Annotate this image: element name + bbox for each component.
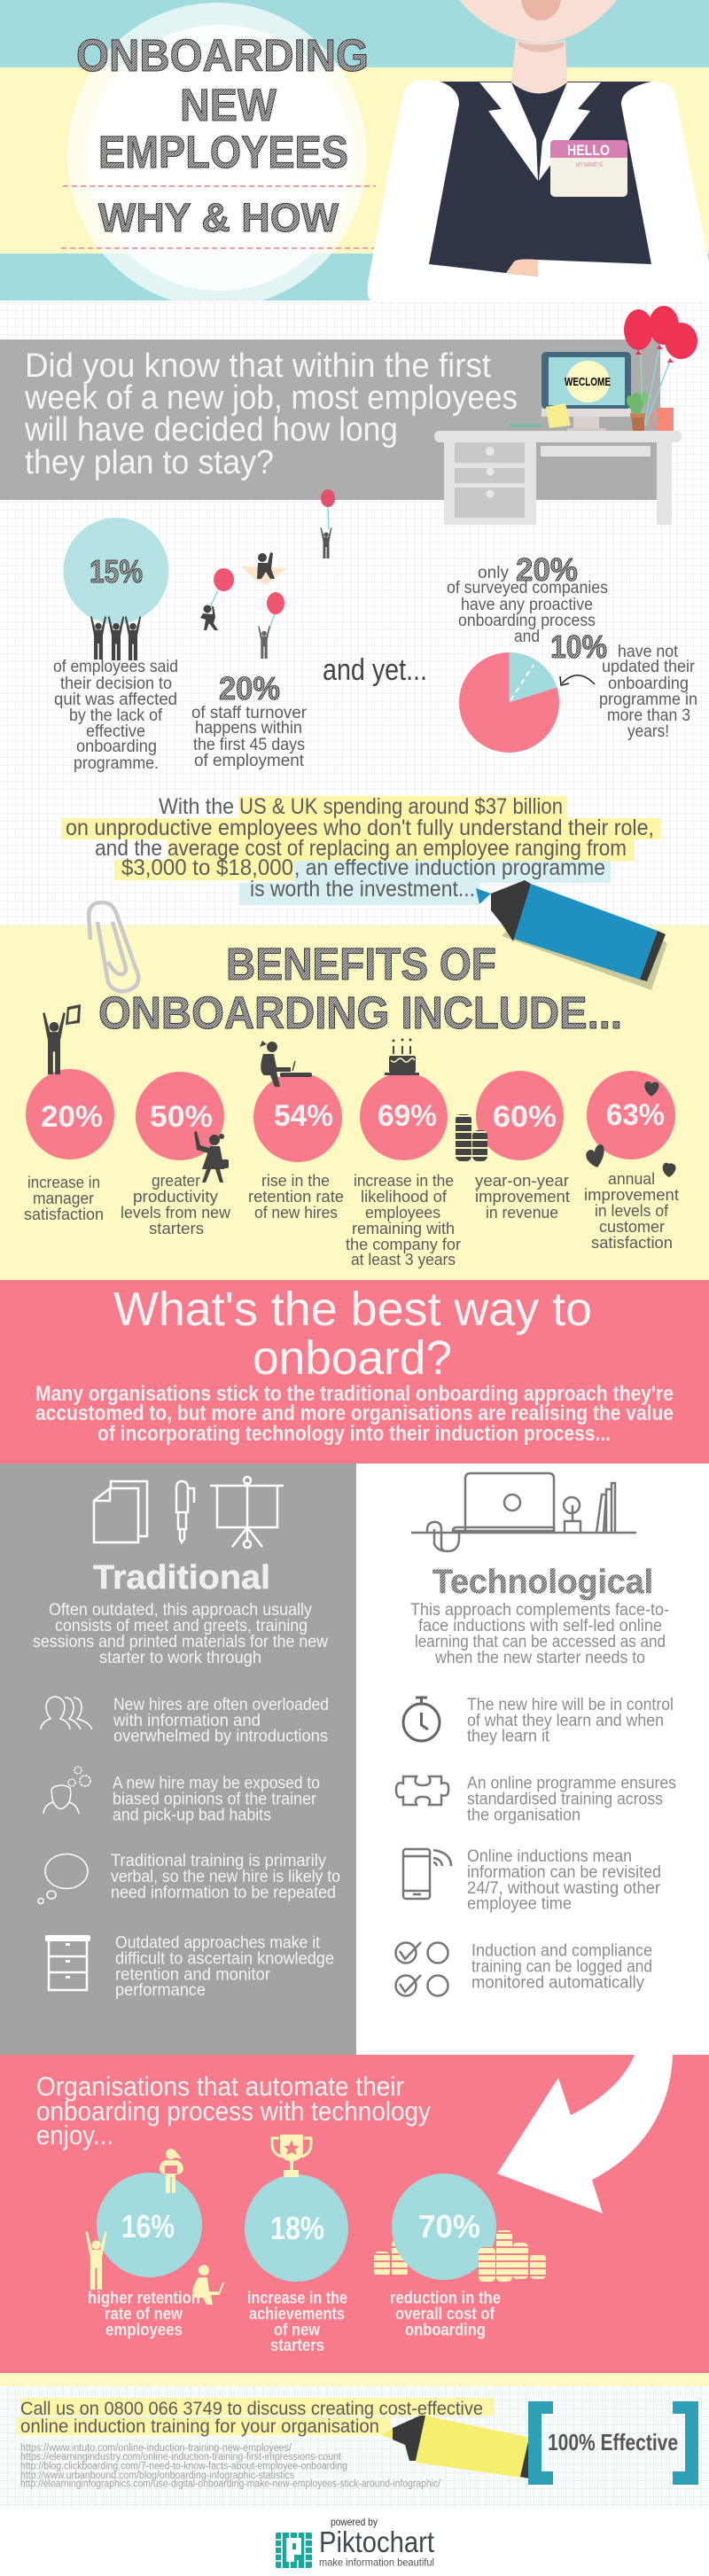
sources: https://www.intuto.com/online-induction-training-new-employees/ <box>20 2443 292 2454</box>
stat labels <box>88 2289 501 2355</box>
highlighted paragraph: , an effective induction programme <box>294 855 605 880</box>
heading: enjoy... <box>36 2119 113 2151</box>
benefit labels: in revenue <box>486 1204 558 1222</box>
stat: 20% staff turnover: the first 45 days <box>193 736 305 754</box>
item: stopwatch: The new hire will be in control <box>467 1696 674 1714</box>
intro: Often outdated, this approach usually <box>49 1601 312 1620</box>
footer: Piktochart logo: make information beautiful <box>319 2556 434 2569</box>
highlighted paragraph: US & UK spending around $37 billion <box>239 794 563 819</box>
intro: face inductions with self-led online <box>418 1617 662 1635</box>
item: biased opinions <box>43 1767 320 1824</box>
item: stopwatch: they learn it <box>467 1727 550 1746</box>
icon: hearts <box>586 1081 676 1177</box>
item: overloaded: with information and <box>113 1712 261 1730</box>
item: stopwatch <box>403 1696 674 1746</box>
panel: traditional <box>0 1464 356 2055</box>
item: checklist: training can be logged and <box>471 1957 652 1977</box>
stat: 20% and 10% of companies: onboarding <box>608 675 689 693</box>
benefit labels <box>24 1170 679 1268</box>
icon: laptop on shelf <box>411 1473 636 1551</box>
stat labels: higher retention <box>88 2289 200 2308</box>
item: checklist: Induction and compliance <box>471 1941 652 1961</box>
item: biased opinions: A new hire may be exposed to <box>113 1775 320 1792</box>
yellow divider strip <box>0 2373 709 2386</box>
highlighted paragraph: With the <box>159 794 234 819</box>
stat: 20% and 10% of companies <box>447 551 697 753</box>
sources: https://elearningindustry.com/online-induction-training-first-impressions-count <box>20 2452 342 2463</box>
panel: did you know band <box>0 340 660 500</box>
stat: 20% staff turnover: of employment <box>194 752 305 770</box>
benefit labels: productivity <box>133 1188 218 1206</box>
heading: traditional: Traditional <box>93 1559 270 1596</box>
benefit labels: year-on-year <box>475 1172 569 1190</box>
item: puzzle piece: An online programme ensures <box>467 1775 676 1792</box>
stat: 20% and 10% of companies: more than 3 <box>607 706 690 725</box>
icon: paperclip <box>89 902 138 991</box>
intro <box>410 1601 669 1667</box>
stat: 20% and 10% of companies: 10% <box>550 628 607 665</box>
benefit labels: increase in the <box>354 1172 454 1190</box>
item: biased opinions: and pick-up bad habits <box>113 1807 271 1824</box>
item: overloaded <box>41 1696 329 1746</box>
heading: ONBOARDING INCLUDE... <box>98 987 622 1038</box>
title: ONBOARDING <box>76 30 369 81</box>
heading: Organisations that automate their <box>36 2071 404 2102</box>
arrow: large curved white <box>497 2055 673 2213</box>
stat labels: achievements <box>249 2305 345 2324</box>
text: and yet: and yet... <box>323 653 427 687</box>
stat: 20% staff turnover: happens within <box>195 719 302 738</box>
call to action <box>17 2398 494 2437</box>
item: overloaded: overwhelmed by introductions <box>113 1727 328 1746</box>
stat percentages <box>121 2208 480 2246</box>
stat: 20% and 10% of companies: onboarding process <box>458 612 596 630</box>
icon: coin stacks <box>479 2230 546 2282</box>
icon: woman on laptop <box>260 1041 312 1087</box>
footer: Piktochart logo: powered by <box>331 2516 378 2528</box>
desk <box>434 431 682 525</box>
panel: automation benefits <box>0 2055 709 2373</box>
item: filing cabinet: difficult to ascertain knowledge <box>115 1950 334 1968</box>
stat: 15% quit: programme. <box>74 754 159 773</box>
heading: onboard? <box>253 1331 452 1385</box>
icon: presentation board <box>210 1477 284 1548</box>
stat: 15% quit: effective <box>86 722 145 741</box>
icon: birthday cake <box>385 1039 419 1075</box>
benefit labels: employees <box>365 1204 440 1222</box>
panel: best way to onboard <box>0 1280 709 1464</box>
benefit labels: at least 3 years <box>351 1251 456 1268</box>
item: smartphone <box>403 1847 661 1913</box>
benefit labels: greater <box>152 1172 200 1190</box>
call to action: online induction training for your organisation <box>20 2416 379 2437</box>
benefit percentages: 20% <box>41 1100 103 1134</box>
benefit labels: improvement <box>475 1188 570 1206</box>
panel: call to action and sources <box>0 2386 709 2508</box>
arrow <box>560 675 595 685</box>
stat labels: reduction in the <box>390 2289 501 2308</box>
brackets with 100% effective <box>528 2401 698 2485</box>
illustration: new employee <box>368 0 709 301</box>
stat: 20% and 10% of companies: of surveyed companies <box>447 579 608 597</box>
benefit labels: improvement <box>584 1186 679 1204</box>
item: smartphone: Online inductions mean <box>467 1847 632 1866</box>
benefit labels: retention rate <box>248 1188 344 1206</box>
benefit labels: satisfaction <box>591 1234 673 1252</box>
benefit percentages: 63% <box>606 1098 665 1132</box>
stat labels: increase in the <box>247 2289 347 2308</box>
icon: woman with laptop <box>160 2149 183 2193</box>
benefit labels: in levels of <box>595 1202 669 1220</box>
call to action: Call us on 0800 066 3749 to discuss creating cost-effective <box>20 2399 483 2419</box>
stat labels: rate of new <box>105 2305 183 2324</box>
icon: balloons and floating people <box>200 489 335 659</box>
question text: they plan to stay? <box>25 444 274 481</box>
benefit labels: the company for <box>346 1236 461 1253</box>
brackets with 100% effective: 100% Effective <box>548 2429 678 2455</box>
question text: Did you know that within the first <box>25 347 491 385</box>
heading: technological: Technological <box>432 1564 653 1601</box>
icon: three people lifting <box>90 616 141 660</box>
stat: 15% quit: quit was affected <box>54 691 177 709</box>
question text <box>24 347 518 481</box>
intro text: of incorporating technology into their induction process... <box>97 1422 611 1446</box>
benefit labels: likelihood of <box>361 1188 448 1206</box>
stat: 15% quit: of employees said <box>53 658 178 676</box>
title: WHY & HOW <box>98 195 339 240</box>
item: filing cabinet: retention and monitor <box>115 1966 271 1984</box>
item: smartphone: employee time <box>467 1895 572 1913</box>
intro text <box>35 1382 674 1446</box>
intro: starter to work through <box>99 1649 261 1667</box>
stat percentages: 18% <box>270 2210 324 2246</box>
item: filing cabinet <box>45 1934 334 2000</box>
item: verbal training: need information to be repeated <box>111 1884 336 1902</box>
item: verbal training <box>38 1852 340 1904</box>
item: biased opinions: biased opinions of the trainer <box>113 1791 317 1808</box>
stat: 15% quit: 15% <box>90 553 143 589</box>
item: puzzle piece <box>396 1775 676 1824</box>
item: puzzle piece: standardised training across <box>467 1791 663 1808</box>
item: verbal training: verbal, so the new hire is likely to <box>111 1868 340 1886</box>
benefit labels: customer <box>599 1218 665 1236</box>
item: puzzle piece: the organisation <box>467 1807 580 1824</box>
icon: man arms up <box>85 2231 107 2290</box>
benefit labels: levels from new <box>121 1204 231 1222</box>
benefit labels: starters <box>149 1220 204 1237</box>
stat: 20% and 10% of companies: years! <box>627 722 669 741</box>
item: overloaded: New hires are often overloaded <box>113 1696 329 1714</box>
benefit labels: of new hires <box>254 1204 338 1222</box>
intro: when the new starter needs to <box>434 1649 645 1667</box>
highlighted paragraph: is worth the investment... <box>250 877 475 902</box>
sources: http://elearninginfographics.com/use-digital-onboarding-make-new-employees-stick-around-infographic/ <box>20 2478 441 2489</box>
stat: 20% and 10% of companies: programme in <box>599 691 697 709</box>
highlighted paragraph: on unproductive employees who don't fully understand their role, <box>66 816 654 840</box>
icon: woman with phone <box>194 1131 229 1183</box>
logo mark <box>276 2533 312 2568</box>
pie chart <box>459 652 559 753</box>
benefit labels: rise in the <box>261 1172 330 1190</box>
panel: benefits <box>0 902 709 1280</box>
intro: consists of meet and greets, training <box>55 1617 308 1635</box>
footer: Piktochart logo: Piktochart <box>319 2525 434 2558</box>
stat: 20% and 10% of companies: 20% <box>516 551 578 588</box>
title: EMPLOYEES <box>98 127 348 177</box>
icon: man with clipboard <box>43 1004 81 1074</box>
grid background <box>0 301 709 925</box>
stat: 20% and 10% of companies: have not <box>618 643 679 661</box>
intro: sessions and printed materials for the new <box>33 1633 328 1651</box>
icon: coin stacks <box>456 1114 487 1161</box>
stat: 20% staff turnover: 20% <box>219 670 280 706</box>
title <box>76 30 369 240</box>
benefit percentages: 60% <box>493 1100 557 1134</box>
stat labels: onboarding <box>405 2321 486 2340</box>
intro <box>33 1601 328 1667</box>
stat: 20% staff turnover <box>191 489 335 770</box>
heading: BENEFITS OF <box>226 939 496 989</box>
icon: yellow highlighter <box>381 2416 536 2478</box>
stat: 20% and 10% of companies: updated their <box>602 658 696 676</box>
benefit labels: remaining with <box>352 1220 455 1237</box>
name badge <box>550 140 627 197</box>
computer <box>541 352 631 431</box>
highlighted paragraph: $3,000 to $18,000 <box>121 855 293 880</box>
stat labels: overall cost of <box>395 2305 495 2324</box>
balloons <box>624 306 697 363</box>
item: filing cabinet: performance <box>115 1981 206 2000</box>
panel: technological <box>356 1464 709 2055</box>
sources <box>20 2443 441 2489</box>
heading: What's the best way to <box>113 1283 592 1336</box>
computer: WECLOME <box>565 375 611 388</box>
benefit labels: increase in <box>27 1174 100 1191</box>
item: smartphone: information can be revisited <box>467 1863 661 1882</box>
left coins behind circle <box>374 2240 408 2276</box>
icon: documents <box>94 1481 147 1542</box>
sources: http://www.urbanbound.com/blog/onboarding-infographic-statistics <box>20 2471 294 2481</box>
benefit labels: manager <box>33 1190 94 1207</box>
question text: week of a new job, most employees <box>24 379 518 417</box>
item: stopwatch: of what they learn and when <box>467 1712 664 1730</box>
stat: 20% and 10% of companies: only <box>478 564 509 582</box>
stat circles <box>97 2173 496 2282</box>
item: smartphone: 24/7, without wasting other <box>467 1879 661 1898</box>
stat percentages: 70% <box>418 2208 480 2244</box>
question text: will have decided how long <box>24 411 398 449</box>
heading <box>113 1283 592 1385</box>
name badge: MY NAME IS <box>576 162 603 168</box>
icon: blue highlighter <box>476 880 667 990</box>
intro: This approach complements face-to- <box>410 1601 669 1620</box>
heading <box>36 2071 431 2151</box>
item: verbal training: Traditional training is primarily <box>111 1852 326 1870</box>
stat: 15% quit <box>53 518 178 773</box>
stat: 15% quit: by the lack of <box>69 706 163 725</box>
footer: Piktochart logo <box>276 2516 434 2569</box>
heading <box>98 939 622 1038</box>
highlighted paragraph: average cost of replacing an employee ranging from <box>168 836 627 861</box>
stat labels: employees <box>105 2321 183 2340</box>
benefit percentages: 69% <box>378 1099 437 1133</box>
benefit labels: satisfaction <box>24 1206 104 1223</box>
item: checklist <box>395 1941 652 1996</box>
stat labels: of new <box>274 2321 320 2340</box>
highlighted paragraph: and the <box>95 836 162 861</box>
icon: trophy <box>272 2135 311 2177</box>
benefit percentages: 54% <box>274 1099 333 1133</box>
stat: 20% and 10% of companies: have any proactive <box>461 596 593 614</box>
stat: 15% quit: their decision to <box>60 675 172 693</box>
stat labels: starters <box>270 2337 324 2355</box>
panel: header <box>0 0 709 311</box>
icon: pen <box>176 1481 194 1542</box>
name badge: HELLO <box>567 142 610 159</box>
benefit labels: annual <box>608 1170 655 1188</box>
intro: learning that can be accessed as and <box>415 1633 666 1651</box>
stat: 15% quit: onboarding <box>76 738 157 756</box>
stat: 20% and 10% of companies: and <box>514 628 540 646</box>
stat percentages: 16% <box>121 2208 175 2244</box>
sources: http://blog.clickboarding.com/7-need-to-know-facts-about-employee-onboarding <box>20 2461 347 2471</box>
item: filing cabinet: Outdated approaches make it <box>115 1934 321 1952</box>
highlighted paragraph <box>61 794 660 905</box>
benefit percentages <box>41 1098 665 1134</box>
benefit percentages: 50% <box>150 1100 213 1134</box>
illustration: welcome desk <box>434 306 697 525</box>
title backdrop ellipses <box>0 3 372 311</box>
benefit circles <box>26 1069 675 1162</box>
item: checklist: monitored automatically <box>471 1973 644 1993</box>
title: NEW <box>180 80 277 130</box>
stat: 20% staff turnover: of staff turnover <box>191 704 308 722</box>
icon: seated person <box>192 2265 223 2305</box>
heading: onboarding process with technology <box>36 2096 431 2127</box>
